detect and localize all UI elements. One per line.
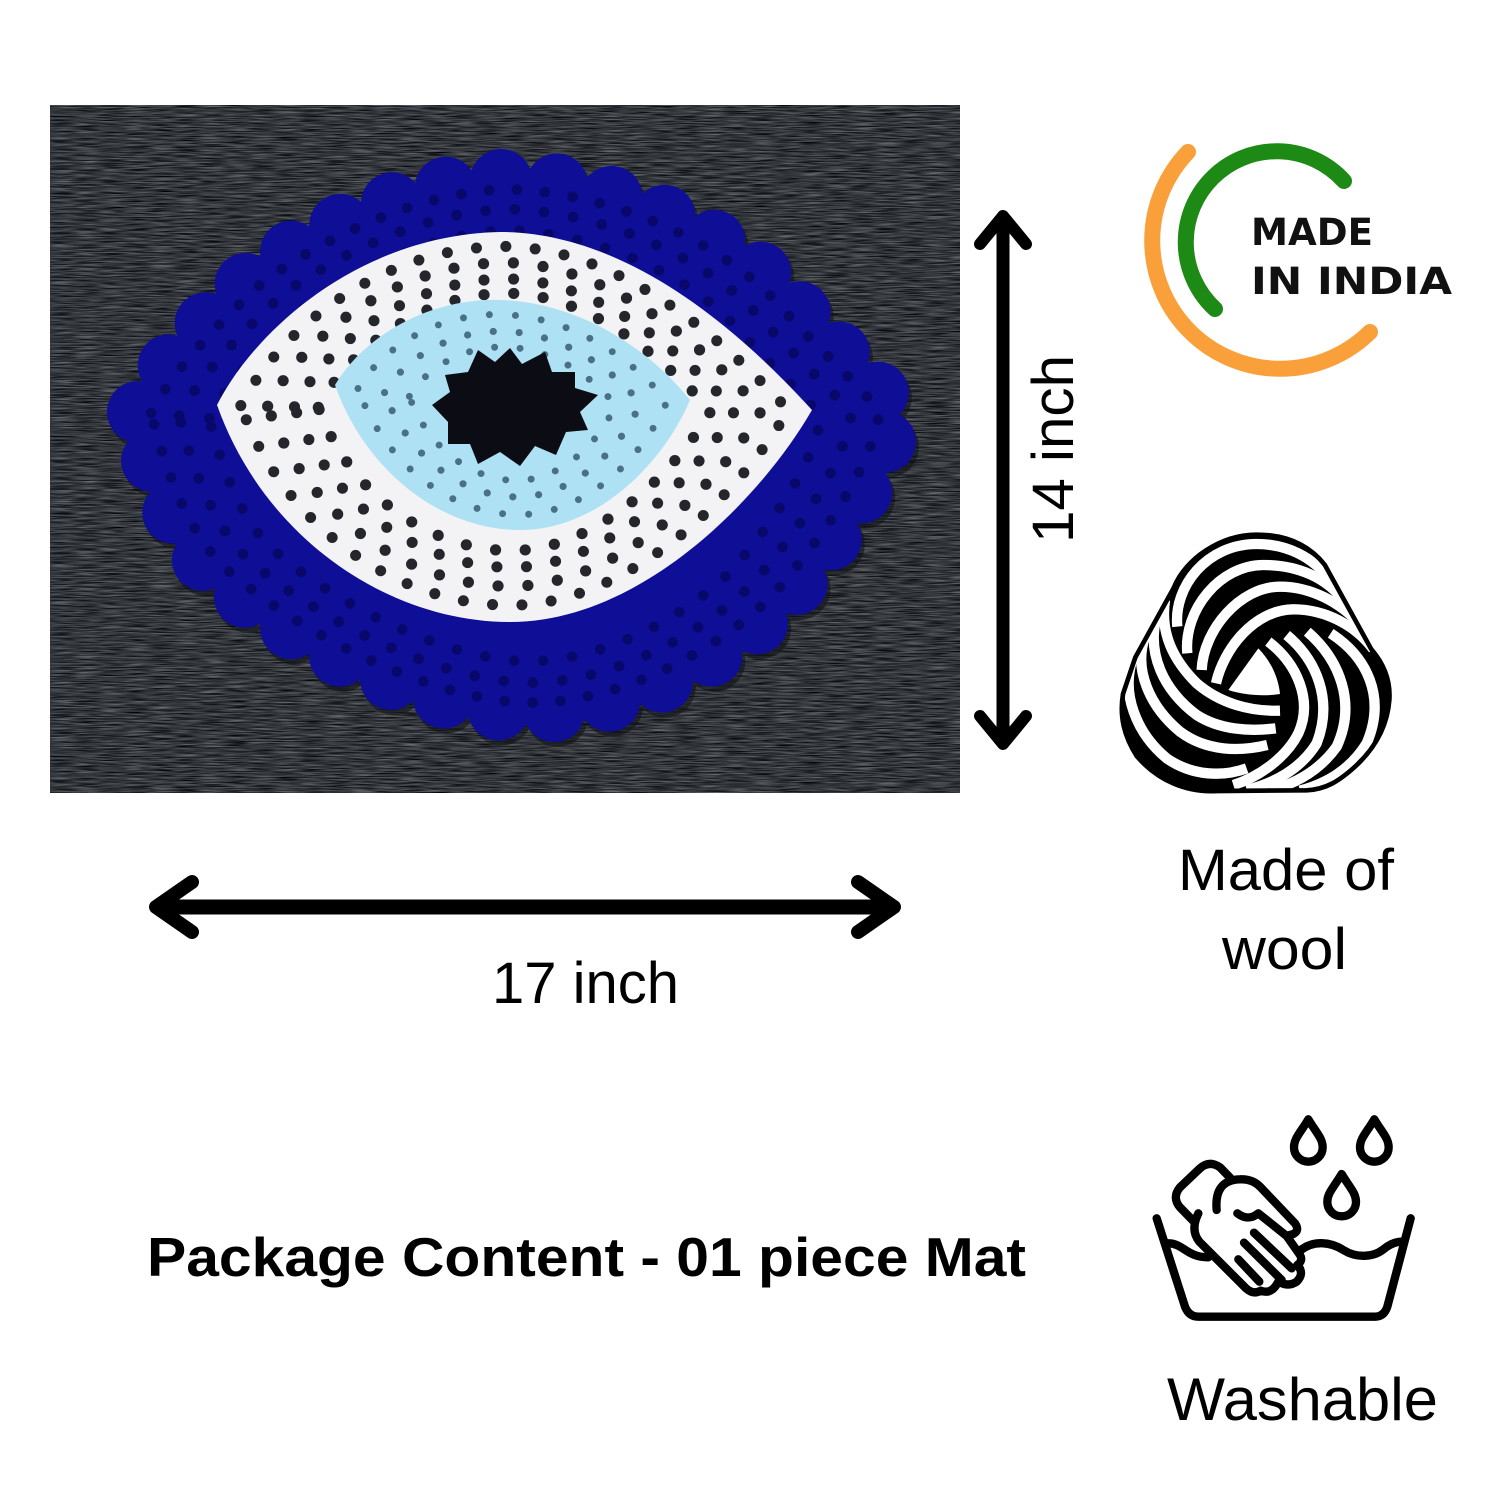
water line xyxy=(1168,1242,1402,1257)
mat shadow xyxy=(141,185,896,717)
light blue iris xyxy=(335,300,690,530)
heading: package content: Package Content - 01 piece Mat xyxy=(147,1226,1026,1288)
icon: wool ball xyxy=(1122,535,1389,791)
label: 17 inch: 17 inch xyxy=(492,951,679,1016)
photo: evil eye crochet mat on carpet xyxy=(50,105,960,793)
black pupil xyxy=(432,348,598,466)
arrow: height dimension xyxy=(980,216,1026,744)
badge text: MADE xyxy=(1251,211,1373,254)
carpet background xyxy=(50,105,960,793)
label: made of wool xyxy=(1178,838,1395,982)
hand and cuff xyxy=(1176,1164,1301,1292)
label: 14 inch: 14 inch xyxy=(1021,355,1086,543)
water drops xyxy=(1294,1119,1389,1216)
label: made of wool: Made of xyxy=(1178,838,1395,903)
white eye area xyxy=(217,232,812,622)
badge: made in india: IN INDIA xyxy=(1251,260,1452,303)
label: made of wool: wool xyxy=(1221,917,1347,982)
green arc xyxy=(1186,151,1344,309)
icon: hand washing in tub xyxy=(1157,1119,1411,1317)
arrow: width dimension xyxy=(156,882,894,932)
blue scalloped border xyxy=(138,180,893,712)
label: washable: Washable xyxy=(1167,1366,1438,1433)
badge: made in india xyxy=(1152,151,1452,369)
tub xyxy=(1157,1218,1411,1317)
orange arc xyxy=(1152,152,1370,369)
